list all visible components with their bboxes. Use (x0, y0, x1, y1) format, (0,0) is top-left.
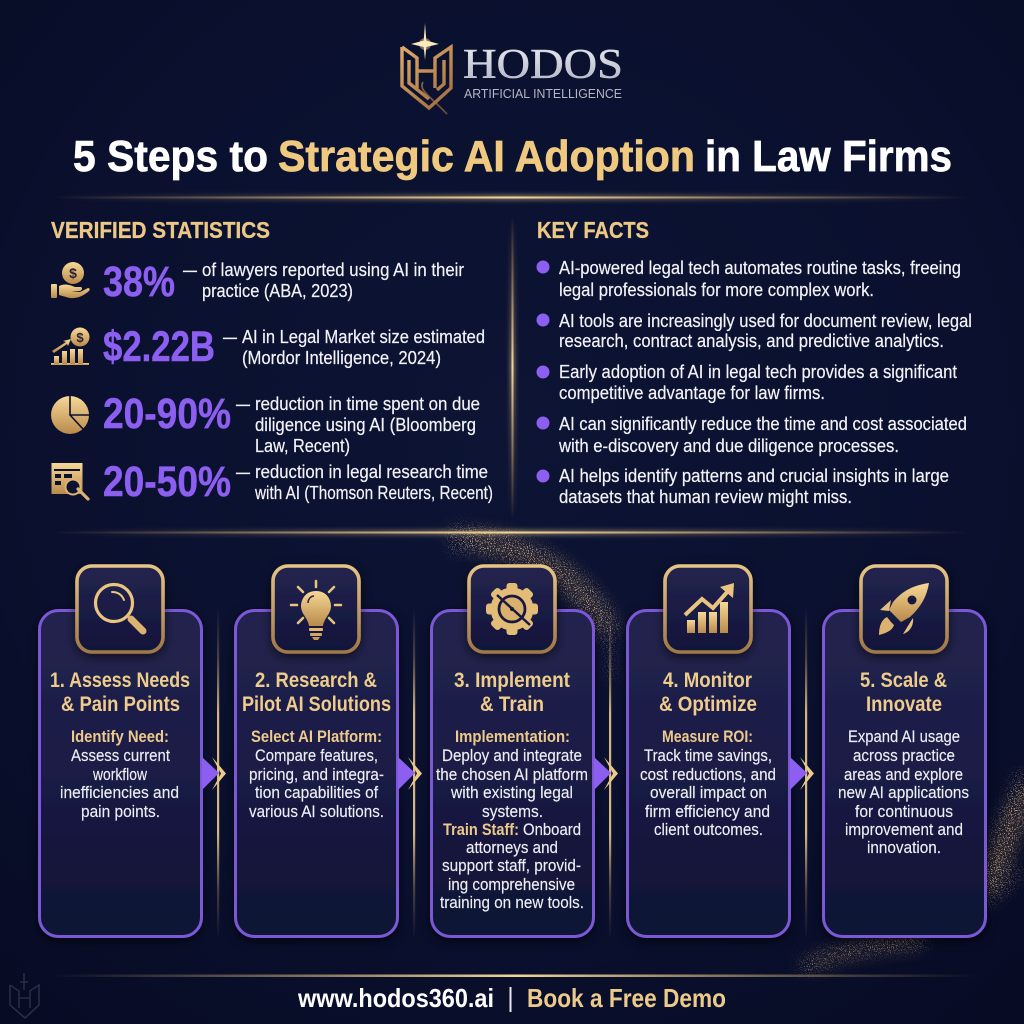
icon: light bulb (273, 566, 359, 652)
fact 3: Early adoption of AI in legal tech provides a significant (559, 362, 957, 382)
panel: step 1 (40, 566, 202, 936)
heading: step 3: & Train (480, 693, 544, 716)
text: step 3: attorneys and (466, 838, 558, 857)
text: step 3 (436, 727, 588, 912)
title: in Law Firms (705, 132, 952, 181)
text: step 5: new AI applications (838, 783, 969, 802)
text: step 2: pricing, and integra- (249, 765, 384, 784)
stat: 38%: 38% (103, 258, 175, 306)
stat: 20-90%: diligence using AI (Bloomberg (255, 415, 476, 435)
text: step 1 (60, 727, 179, 821)
arrow: step 3 to 4 (594, 757, 618, 790)
panel: step 2 (236, 566, 398, 936)
stat: 20-90%: — (236, 394, 250, 414)
watermark logo (10, 973, 39, 1018)
text: step 3: the chosen AI platform (436, 765, 588, 784)
text: step 4: Measure ROI: (662, 727, 753, 746)
fact 5 (536, 466, 949, 507)
gold dust particles (450, 538, 1024, 968)
stat: 20-50% (103, 458, 493, 506)
fact 1: legal professionals for more complex work. (559, 280, 874, 300)
fact 4: with e-discovery and due diligence processes. (558, 436, 899, 456)
panel: step 5 (824, 566, 986, 936)
text: step 3: Onboard (523, 820, 581, 839)
panel: key facts (536, 217, 972, 507)
fact 2: AI tools are increasingly used for document review, legal (559, 311, 972, 331)
stat: $2.22B: $2.22B (103, 323, 215, 371)
text: step 1: Identify Need: (71, 727, 169, 746)
vertical connector lines (217, 607, 807, 940)
text: step 2: Compare features, (255, 746, 378, 765)
heading: step 2: Pilot AI Solutions (242, 693, 391, 716)
text: step 4 (640, 727, 776, 839)
icon: gear (469, 566, 555, 652)
icon: growth chart with coin: $ (76, 330, 84, 345)
text: step 5: areas and explore (844, 765, 963, 784)
heading: step 5: 5. Scale & (860, 669, 947, 692)
logo tagline: ARTIFICIAL INTELLIGENCE (464, 87, 622, 101)
heading: step 2 (242, 669, 391, 716)
icon: hand with coin: $ (69, 265, 77, 281)
fact 1 (536, 258, 961, 300)
icon: growth chart (665, 566, 751, 652)
heading: step 5: Innovate (866, 693, 942, 716)
panel: step 3 (432, 566, 594, 936)
heading: verified statistics: VERIFIED STATISTICS (51, 217, 270, 243)
text: step 4: client outcomes. (654, 820, 763, 839)
fact 3: competitive advantage for law firms. (559, 383, 825, 403)
logo emblem (402, 47, 451, 114)
icon: magnifying glass (77, 566, 163, 652)
text: step 4: cost reductions, and (640, 765, 776, 784)
logo (402, 23, 623, 114)
stat: 38%: of lawyers reported using AI in their (202, 260, 464, 280)
stat: 20-90%: 20-90% (103, 390, 231, 438)
heading: step 4 (659, 669, 757, 716)
text: step 2: tion capabilities of (255, 783, 378, 802)
fact 2 (536, 311, 972, 351)
fact 3 (536, 362, 957, 403)
text: step 3: training on new tools. (440, 893, 584, 912)
fact 1: AI-powered legal tech automates routine tasks, freeing (559, 258, 961, 278)
stat: 20-50%: reduction in legal research time (255, 462, 488, 482)
text: step 5: improvement and (845, 820, 963, 839)
heading: key facts: KEY FACTS (537, 217, 649, 243)
stat: $2.22B: (Mordor Intelligence, 2024) (242, 348, 441, 368)
icon: document search (52, 463, 88, 499)
fact 5: datasets that human review might miss. (559, 487, 852, 507)
title: Strategic AI Adoption (278, 132, 695, 181)
heading: step 1 (50, 669, 190, 716)
stat: 20-90%: Law, Recent) (255, 436, 350, 456)
stat: 20-50%: 20-50% (103, 458, 231, 506)
text: step 4: overall impact on (650, 783, 767, 802)
text: step 5: innovation. (867, 838, 941, 857)
text: step 4: Track time savings, (644, 746, 772, 765)
icon: hand with coin (51, 262, 90, 298)
heading: step 4: 4. Monitor (663, 669, 752, 692)
heading: step 4: & Optimize (659, 693, 757, 716)
text: step 1: Assess current (71, 746, 170, 765)
icon: rocket (861, 566, 947, 652)
arrow: step 1 to 2 (202, 757, 226, 790)
text: step 3: systems. (482, 802, 543, 821)
logo star (411, 23, 439, 60)
text: step 2: Select AI Platform: (251, 727, 382, 746)
panel: step 4 (628, 566, 790, 936)
text: step 5: Expand AI usage (848, 727, 960, 746)
fact 4: AI can significantly reduce the time and cost associated (559, 414, 967, 434)
text: step 3: with existing legal (450, 783, 573, 802)
gold dust glow (470, 540, 1024, 965)
title: 5 Steps to (73, 132, 268, 181)
stat: $2.22B: AI in Legal Market size estimated (242, 327, 485, 347)
stat: 38%: practice (ABA, 2023) (202, 281, 353, 301)
text: step 2 (249, 727, 384, 821)
heading: step 5 (860, 669, 947, 716)
text: step 3: Deploy and integrate (442, 746, 582, 765)
heading: step 1: 1. Assess Needs (50, 669, 190, 692)
text: step 3: support staff, provid- (442, 856, 581, 875)
stat: 20-90% (103, 390, 480, 456)
heading: step 2: 2. Research & (255, 669, 377, 692)
text: step 4: firm efficiency and (645, 802, 770, 821)
stat: 20-50%: with AI (Thomson Reuters, Recent) (254, 483, 493, 503)
stat: 38% (103, 258, 464, 306)
footer: website: www.hodos360.ai (297, 983, 494, 1013)
footer call to action (297, 983, 726, 1013)
heading: step 1: & Pain Points (61, 693, 180, 716)
icon: growth chart with coin (51, 328, 90, 365)
stat: 20-50%: — (236, 462, 250, 482)
stat: 20-90%: reduction in time spent on due (255, 394, 480, 414)
text: step 3: Implementation: (455, 727, 570, 746)
text: step 1: pain points. (81, 802, 160, 821)
heading: step 3: 3. Implement (454, 669, 570, 692)
panel: verified statistics (51, 217, 493, 506)
text: step 1: inefficiencies and (60, 783, 179, 802)
stat: $2.22B (103, 323, 485, 371)
icon: pie chart (51, 396, 89, 434)
arrow: step 2 to 3 (398, 757, 422, 790)
logo wordmark: HODOS (463, 42, 623, 88)
text: step 2: various AI solutions. (249, 802, 384, 821)
text: step 5 (838, 727, 969, 857)
stat: $2.22B: — (223, 327, 237, 347)
text: step 5: for continuous (855, 802, 953, 821)
text: step 3: ing comprehensive (448, 875, 575, 894)
text: step 5: across practice (853, 746, 955, 765)
stat: 38%: — (183, 260, 197, 280)
title (73, 132, 952, 181)
footer: book demo: Book a Free Demo (527, 983, 726, 1013)
fact 4 (536, 414, 967, 456)
heading: step 3 (454, 669, 570, 716)
fact 2: research, contract analysis, and predictive analytics. (559, 331, 944, 351)
text: step 3: Train Staff: (443, 820, 519, 839)
fact 5: AI helps identify patterns and crucial insights in large (559, 466, 949, 486)
arrow: step 4 to 5 (790, 757, 814, 790)
text: step 1: workflow (92, 765, 148, 784)
